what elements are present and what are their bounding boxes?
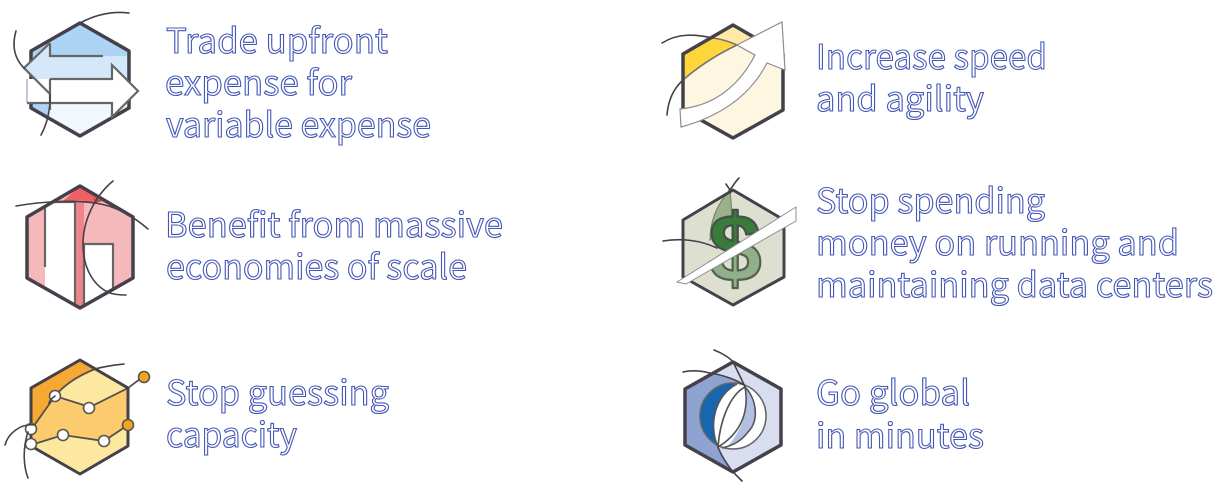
chart markers	[26, 372, 150, 450]
heading: trade upfront expense: Trade upfront	[166, 14, 388, 63]
heading: increase speed: and agility	[816, 72, 984, 121]
heading: stop spending money: money on running and	[816, 216, 1179, 265]
heading: stop spending money	[816, 174, 1213, 307]
heading: go global: in minutes	[816, 409, 984, 458]
heading: trade upfront expense: variable expense	[166, 98, 431, 147]
heading: go global: Go global	[816, 366, 970, 415]
icon: capacity line chart	[5, 345, 150, 478]
heading: increase speed	[816, 30, 1047, 121]
heading: stop guessing capacity: capacity	[166, 408, 297, 457]
heading: stop guessing capacity	[166, 366, 389, 457]
heading: trade upfront expense: expense for	[165, 56, 353, 105]
dollar bottom half: $	[708, 195, 762, 302]
heading: trade upfront expense	[165, 14, 431, 147]
heading: stop spending money: Stop spending	[816, 174, 1045, 223]
icon: globe	[683, 350, 781, 481]
heading: increase speed: Increase speed	[816, 30, 1047, 79]
icon: speed and agility arrow	[662, 20, 785, 138]
icon: dollar sign with slash	[663, 178, 796, 305]
leaf shape	[710, 190, 732, 240]
heading: go global	[816, 366, 984, 458]
heading: stop spending money: maintaining data centers	[816, 258, 1213, 307]
dollar top half: $	[708, 195, 762, 302]
heading: economies of scale: economies of scale	[166, 240, 467, 289]
heading: economies of scale	[165, 198, 503, 289]
icon: economies of scale bars	[16, 181, 148, 314]
heading: stop guessing capacity: Stop guessing	[166, 366, 389, 415]
icon: trade expense arrows	[14, 12, 140, 140]
heading: economies of scale: Benefit from massive	[165, 198, 503, 247]
